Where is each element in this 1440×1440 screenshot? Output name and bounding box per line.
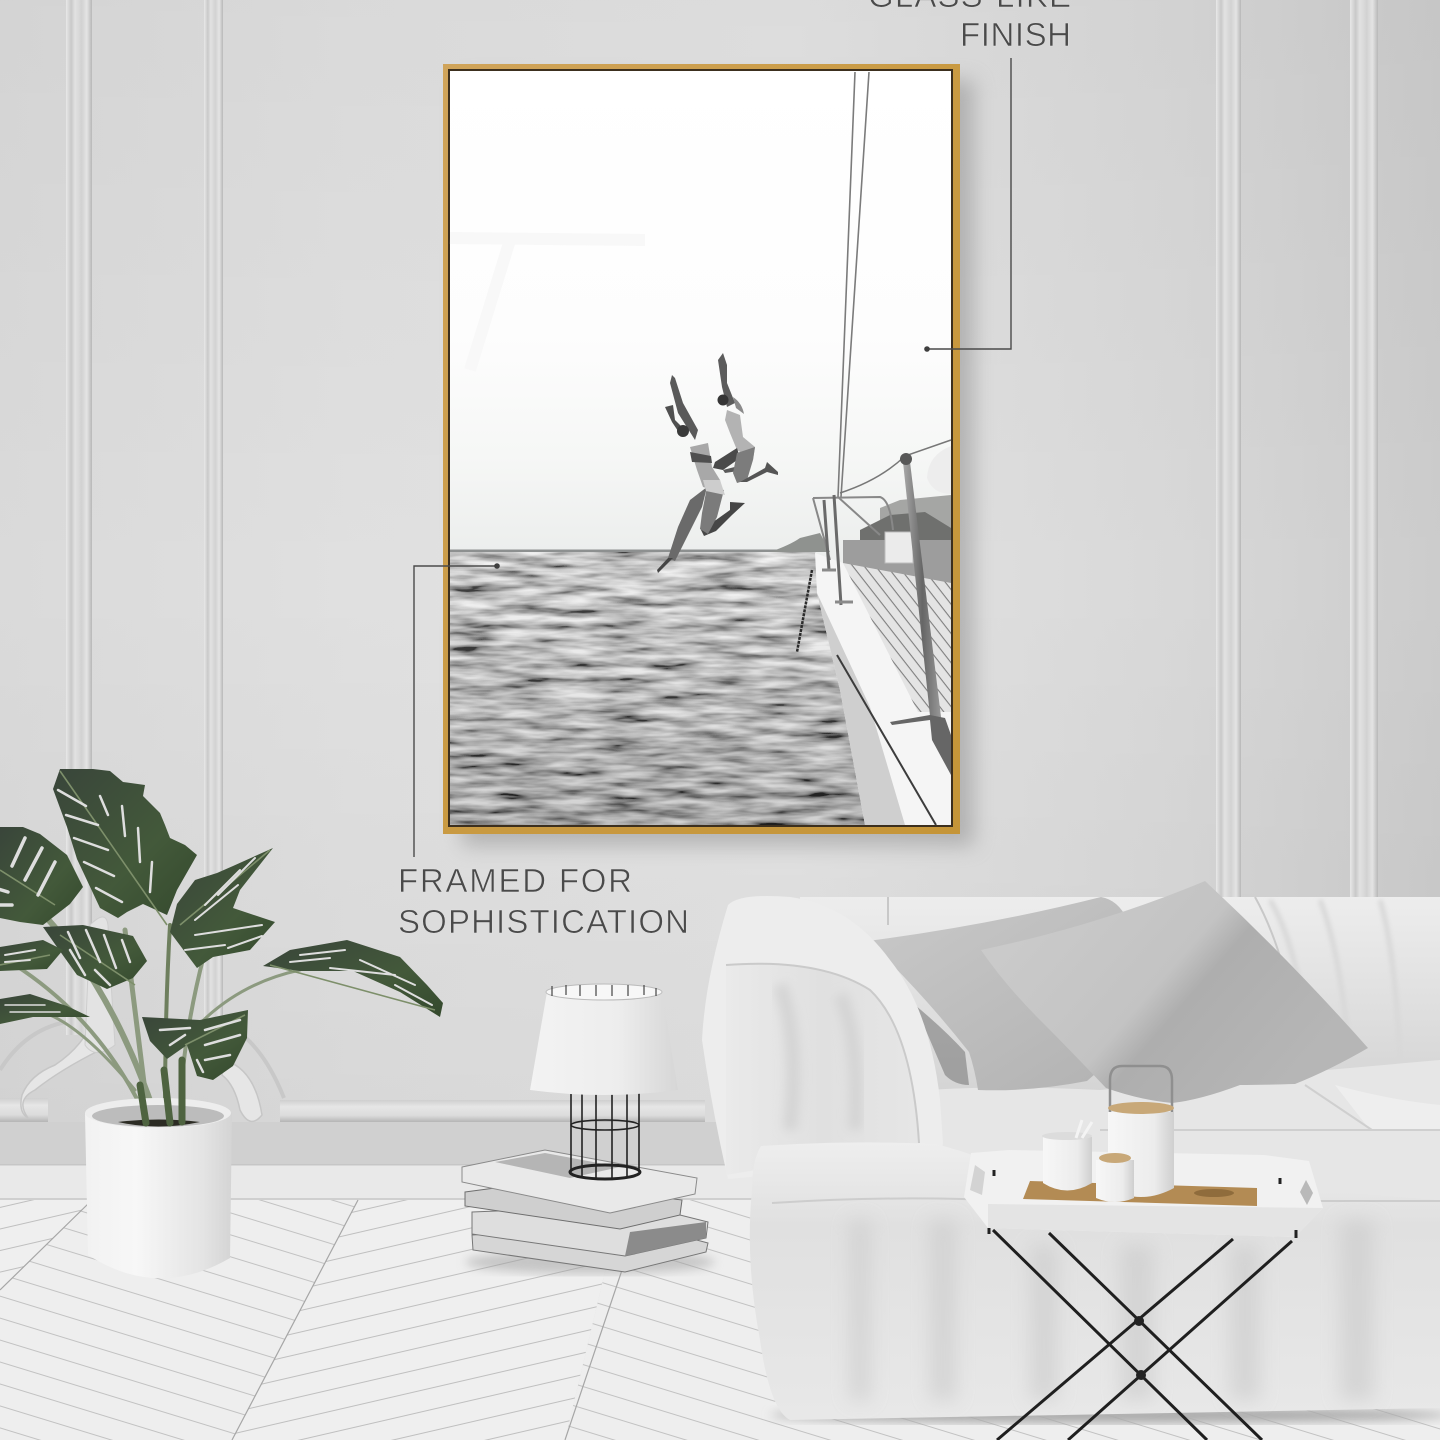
artwork shadow on wall <box>462 80 974 846</box>
side table with tray <box>964 1066 1323 1440</box>
wooden board <box>1023 1181 1257 1206</box>
leaf slits <box>0 790 432 1072</box>
main stanchion pole <box>903 462 942 725</box>
background buildings and hills <box>880 495 951 560</box>
distant headland <box>770 533 830 552</box>
callout text: FINISH <box>960 16 1071 53</box>
sofa arm <box>702 896 943 1179</box>
callout: glass-like finish <box>868 0 1071 352</box>
wall moulding panels <box>0 0 1378 1122</box>
floor and baseboard <box>0 1164 1440 1440</box>
leaf midrib highlights <box>0 771 435 1045</box>
sailboat <box>797 72 951 825</box>
lamp shade <box>530 992 678 1095</box>
callout text <box>868 0 1071 53</box>
deck fitting <box>890 715 951 775</box>
sofa front cushion <box>750 1142 1440 1420</box>
deck planks <box>843 563 951 712</box>
pillow behind <box>868 897 1180 1090</box>
left woman <box>657 375 745 573</box>
plant pot <box>85 1098 232 1278</box>
stanchions <box>824 495 841 605</box>
callout: framed for sophistication <box>398 563 689 940</box>
stems <box>15 900 300 1115</box>
seat cushions <box>930 1060 1440 1230</box>
callout text: FRAMED FOR <box>398 862 632 899</box>
monstera leaves <box>0 769 443 1080</box>
two jumping women <box>657 353 778 573</box>
sea <box>450 550 870 825</box>
right woman <box>713 353 778 483</box>
ceramic jar with handle <box>1108 1066 1174 1197</box>
deck box <box>885 532 913 563</box>
glass reflection <box>450 238 645 370</box>
anchor chain <box>797 570 812 652</box>
sail cover <box>927 446 951 494</box>
potted plant <box>0 769 443 1278</box>
gold frame <box>443 64 960 834</box>
hull <box>815 553 951 825</box>
tray <box>964 1150 1323 1237</box>
table legs <box>993 1230 1292 1440</box>
back cushions <box>800 897 1440 1110</box>
framed artwork <box>443 64 960 834</box>
leader line <box>927 58 1011 349</box>
callout text: SOPHISTICATION <box>398 903 689 940</box>
rigging wires <box>838 72 869 497</box>
callout text <box>398 862 689 940</box>
lamp cage <box>570 1093 640 1179</box>
ceramic cup <box>1042 1120 1092 1190</box>
small ceramic jar <box>1096 1153 1134 1202</box>
sofa <box>702 881 1440 1423</box>
stack of books <box>462 1150 715 1274</box>
pillow in front <box>981 881 1368 1103</box>
leader line <box>414 566 497 857</box>
table lamp <box>530 984 678 1179</box>
sky <box>450 71 951 825</box>
base leaf stems over pot <box>140 1060 182 1123</box>
